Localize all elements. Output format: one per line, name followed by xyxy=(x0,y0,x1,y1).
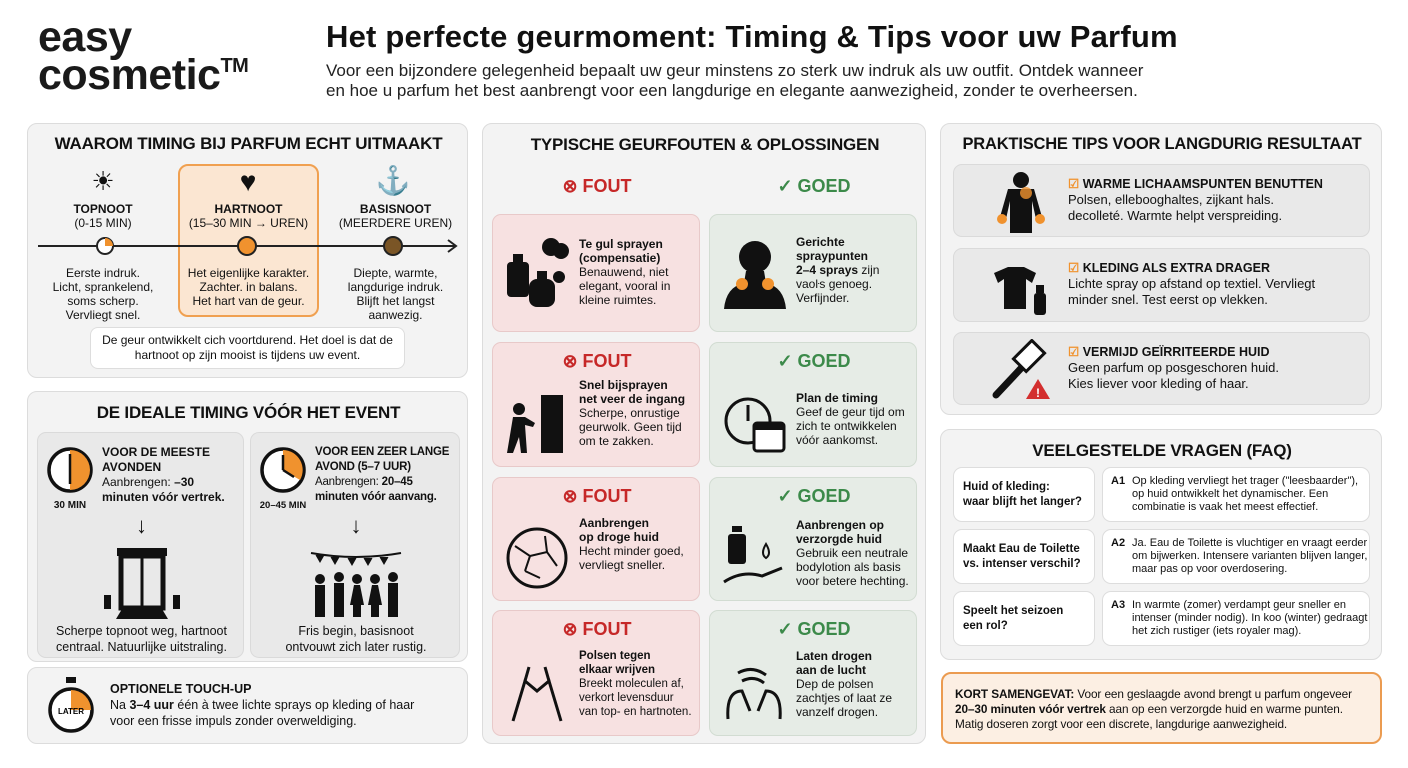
icon: heart: ♥ xyxy=(240,166,256,197)
panel: faq: A1 xyxy=(1111,475,1125,487)
card goed 2: Geef de geur tijd om xyxy=(796,405,905,419)
card fout 2: Scherpe, onrustige xyxy=(579,406,680,420)
faq 2 xyxy=(953,529,1095,584)
subcard: meeste avonden xyxy=(37,432,244,658)
panel: waarom timing: aanwezig. xyxy=(368,308,423,322)
card goed 3: verzorgde huid xyxy=(796,532,882,546)
heading: DE IDEALE TIMING VÓÓR HET EVENT xyxy=(97,403,400,422)
card goed 2: ✓ GOED xyxy=(777,351,851,371)
basisnoot: BASISNOOT xyxy=(360,202,431,216)
card fout 4: Breekt moleculen af, xyxy=(579,678,684,690)
panel: touch-up xyxy=(27,667,468,744)
panel: waarom timing: Het eigenlijke karakter. xyxy=(188,266,309,280)
panel: geurfouten xyxy=(482,123,926,744)
heading: PRAKTISCHE TIPS VOOR LANGDURIG RESULTAAT xyxy=(962,135,1362,153)
subcard: meeste avonden: centraal. Natuurlijke uitstraling. xyxy=(56,640,227,654)
tip 2: Lichte spray op afstand op textiel. Vervliegt xyxy=(1068,276,1315,291)
icon: stopwatch xyxy=(48,677,94,733)
card fout 2: om te zakken. xyxy=(579,434,654,448)
faq 2: vs. intenser verschil? xyxy=(963,558,1081,570)
panel: ideale timing xyxy=(27,391,468,662)
subcard: lange avond: minuten vóór aanvang. xyxy=(315,491,437,503)
card fout 1: kleine ruimtes. xyxy=(579,293,656,307)
card fout 3: Aanbrengen xyxy=(579,516,649,530)
card goed 2: zich te ontwikkelen xyxy=(796,419,897,433)
card fout 3 xyxy=(492,477,700,601)
heading: VEELGESTELDE VRAGEN (FAQ) xyxy=(1032,441,1292,460)
faq 1: waar blijft het langer? xyxy=(963,496,1082,508)
icon: sun: ☀ xyxy=(91,166,115,196)
card fout 4: elkaar wrijven xyxy=(579,664,655,676)
panel: waarom timing: Vervliegt snel. xyxy=(66,308,140,322)
panel: waarom timing: Eerste indruk. xyxy=(66,266,140,280)
subcard: meeste avonden: VOOR DE MEESTE xyxy=(102,445,210,459)
card goed 2 xyxy=(709,342,917,467)
topnoot xyxy=(73,202,133,230)
panel: touch-up: voor een frisse impuls zonder overweldiging. xyxy=(110,714,357,728)
card goed 3 xyxy=(709,477,917,601)
card goed 1: spraypunten xyxy=(796,249,868,263)
panel: waarom timing: soms scherp. xyxy=(67,294,139,308)
icon: clock 30 xyxy=(47,447,93,493)
panel: faq: A3 xyxy=(1111,599,1125,611)
hartnoot: HARTNOOT xyxy=(214,202,282,216)
note box xyxy=(90,327,405,369)
tip 2: minder snel. Test eerst op vlekken. xyxy=(1068,292,1268,307)
tip 3: Kies liever voor kleding of haar. xyxy=(1068,376,1249,391)
note box: De geur ontwikkelt cich voortdurend. Het doel is dat de xyxy=(102,333,393,347)
card goed 4 xyxy=(709,610,917,736)
card fout 3: ⊗ FOUT xyxy=(562,486,632,506)
icon: stopwatch: LATER xyxy=(58,707,84,716)
panel: waarom timing: Licht, sprankelend, xyxy=(53,280,153,294)
card goed 4: Dep de polsen xyxy=(796,677,873,691)
panel: faq: Op kleding vervliegt het trager ("leesbaarder"), op huid ontwikkelt het dynamischer. Een combinatie is vaak het meest effectief. xyxy=(1132,475,1358,513)
icon: anchor: ⚓ xyxy=(376,165,410,196)
subcard: meeste avonden: Scherpe topnoot weg, hartnoot xyxy=(56,624,227,638)
card fout 3: op droge huid xyxy=(579,530,659,544)
faq 3: een rol? xyxy=(963,620,1008,632)
subcard: meeste avonden: AVONDEN xyxy=(102,460,161,474)
card goed 1: Gerichte xyxy=(796,235,845,249)
card goed 1 xyxy=(709,214,917,332)
panel: waarom timing: Zachter. in balans. xyxy=(199,280,298,294)
subtitle: en hoe u parfum het best aanbrengt voor een langdurige en elegante aanwezigheid, zonder te overheersen. xyxy=(326,81,1138,100)
card fout 2: Snel bijsprayen xyxy=(579,378,668,392)
logo: easy xyxy=(38,13,132,61)
summary callout: 20–30 minuten vóór vertrek aan op een verzorgde huid en warme punten. xyxy=(955,702,1343,716)
panel: faq: A2 xyxy=(1111,537,1125,549)
card fout 1: Benauwend, niet xyxy=(579,265,668,279)
panel: praktische tips xyxy=(940,123,1382,415)
card goed 3: ✓ GOED xyxy=(777,486,851,506)
panel: waarom timing: Het hart van de geur. xyxy=(192,294,305,308)
card goed 3: bodylotion als basis xyxy=(796,560,901,574)
subcard: lange avond: 20–45 MIN xyxy=(260,500,306,511)
panel: faq: In warmte (zomer) verdampt geur sneller en intenser (minder nodig). In koo (winter) gedraagt het zich rustiger (iets royaler mag). xyxy=(1132,599,1367,637)
card goed 3: voor betere hechting. xyxy=(796,574,909,588)
heading: WAAROM TIMING BIJ PARFUM ECHT UITMAAKT xyxy=(55,134,442,153)
tip 2 xyxy=(953,248,1370,322)
panel: faq xyxy=(940,429,1382,660)
card goed 4: zachtjes of laat ze xyxy=(796,691,892,705)
subtitle xyxy=(326,61,1144,100)
subcard: lange avond xyxy=(250,432,460,658)
logo: cosmeticTM xyxy=(38,51,248,99)
card goed 4: vanzelf drogen. xyxy=(796,705,878,719)
topnoot: (0-15 MIN) xyxy=(74,216,132,230)
panel: faq: Ja. Eau de Toilette is vluchtiger en vraagt eerder om bijwerken. Intensere varianten blijven langer, maar pas op voor overdosering. xyxy=(1132,537,1367,575)
card fout 1: (compensatie) xyxy=(579,251,660,265)
card goed 4: ✓ GOED xyxy=(777,619,851,639)
card fout 1 xyxy=(492,214,700,332)
topnoot: TOPNOOT xyxy=(73,202,133,216)
card fout 4: Polsen tegen xyxy=(579,650,651,662)
summary callout: KORT SAMENGEVAT: Voor een geslaagde avond brengt u parfum ongeveer xyxy=(955,687,1352,701)
summary callout: Matig doseren zorgt voor een discrete, langdurige aanwezigheid. xyxy=(955,717,1287,731)
card fout 1: elegant, vooral in xyxy=(579,279,670,293)
card fout 2: ⊗ FOUT xyxy=(562,351,632,371)
subcard: meeste avonden: 30 MIN xyxy=(54,500,86,511)
faq 3: Speelt het seizoen xyxy=(963,605,1063,617)
label goed: ✓ GOED xyxy=(777,176,851,196)
basisnoot: (MEERDERE UREN) xyxy=(339,216,452,230)
subcard: lange avond: AVOND (5–7 UUR) xyxy=(315,461,411,473)
subtitle: Voor een bijzondere gelegenheid bepaalt uw geur minstens zo sterk uw indruk als uw outfit. Ontdek wanneer xyxy=(326,61,1143,80)
panel: waarom timing: langdurige indruk. xyxy=(348,280,443,294)
card fout 4: van top- en hartnoten. xyxy=(579,706,692,718)
panel: touch-up: Na 3–4 uur één à twee lichte sprays op kleding of haar xyxy=(110,698,414,712)
card goed 3: Aanbrengen op xyxy=(796,518,884,532)
card goed 2: Plan de timing xyxy=(796,391,878,405)
basisnoot xyxy=(339,202,452,230)
subcard: lange avond: VOOR EEN ZEER LANGE xyxy=(315,446,449,458)
tip 3: ! xyxy=(1036,386,1040,400)
faq 1: Huid of kleding: xyxy=(963,481,1050,493)
subcard: lange avond: Aanbrengen: 20–45 xyxy=(315,476,413,488)
panel: waarom timing: Blijft het langst xyxy=(356,294,435,308)
faq 3 xyxy=(953,591,1095,646)
card goed 2: vóór aankomst. xyxy=(796,433,878,447)
subcard: lange avond: Fris begin, basisnoot xyxy=(298,624,414,638)
tip 1: Polsen, ellebooghaltes, zijkant hals. xyxy=(1068,192,1274,207)
tip 3: ☑ VERMIJD GEÏRRITEERDE HUID xyxy=(1068,345,1270,359)
tip 3: Geen parfum op posgeschoren huid. xyxy=(1068,360,1279,375)
icon: entrance xyxy=(104,548,180,619)
heading: TYPISCHE GEURFOUTEN & OPLOSSINGEN xyxy=(531,135,879,154)
card fout 3: Hecht minder goed, xyxy=(579,544,684,558)
hartnoot: (15–30 MIN → UREN) xyxy=(189,216,308,230)
card fout 2: geurwolk. Geen tijd xyxy=(579,420,682,434)
label fout: ⊗ FOUT xyxy=(562,176,632,196)
card goed 1: Verfijnder. xyxy=(796,291,849,305)
icon: party xyxy=(310,552,402,617)
subcard: meeste avonden: minuten vóór vertrek. xyxy=(102,490,225,504)
card goed 4: Laten drogen xyxy=(796,649,872,663)
card fout 4: ⊗ FOUT xyxy=(562,619,632,639)
card goed 4: aan de lucht xyxy=(796,663,866,677)
icon: clock 20-45 xyxy=(260,447,306,493)
card goed 3: Gebruik een neutrale xyxy=(796,546,908,560)
card fout 2: net veer de ingang xyxy=(579,392,685,406)
card fout 3: vervliegt sneller. xyxy=(579,558,665,572)
timeline arrow xyxy=(38,236,458,256)
faq 1 xyxy=(953,467,1095,522)
tip 1: ☑ WARME LICHAAMSPUNTEN BENUTTEN xyxy=(1068,177,1323,191)
subcard: meeste avonden: Aanbrengen: –30 xyxy=(102,475,194,489)
panel: waarom timing xyxy=(27,123,468,378)
card fout 4 xyxy=(492,610,700,736)
highlight box hartnoot xyxy=(178,164,319,317)
logo xyxy=(38,13,248,99)
faq 2: Maakt Eau de Toilette xyxy=(963,543,1080,555)
card goed 1: vaoŀs genoeg. xyxy=(796,277,872,291)
tip 1: decolleté. Warmte helpt verspreiding. xyxy=(1068,208,1282,223)
panel: waarom timing: Diepte, warmte, xyxy=(353,266,438,280)
card fout 2 xyxy=(492,342,700,467)
hartnoot xyxy=(189,202,308,230)
subcard: lange avond: ontvouwt zich later rustig. xyxy=(285,640,427,654)
title: Het perfecte geurmoment: Timing & Tips voor uw Parfum xyxy=(326,19,1178,54)
subcard: meeste avonden: ↓ xyxy=(136,513,147,538)
note box: hartnoot op zijn mooist is tijdens uw event. xyxy=(135,348,360,362)
tip 3 xyxy=(953,332,1370,405)
card fout 4: verkort levensduur xyxy=(579,692,674,704)
card goed 1: 2–4 sprays zijn xyxy=(796,263,879,277)
summary callout xyxy=(941,672,1382,744)
tip 2: ☑ KLEDING ALS EXTRA DRAGER xyxy=(1068,261,1270,275)
card fout 1: Te gul sprayen xyxy=(579,237,663,251)
panel: touch-up: OPTIONELE TOUCH-UP xyxy=(110,682,251,696)
tip 1 xyxy=(953,164,1370,237)
subcard: lange avond: ↓ xyxy=(350,513,362,538)
